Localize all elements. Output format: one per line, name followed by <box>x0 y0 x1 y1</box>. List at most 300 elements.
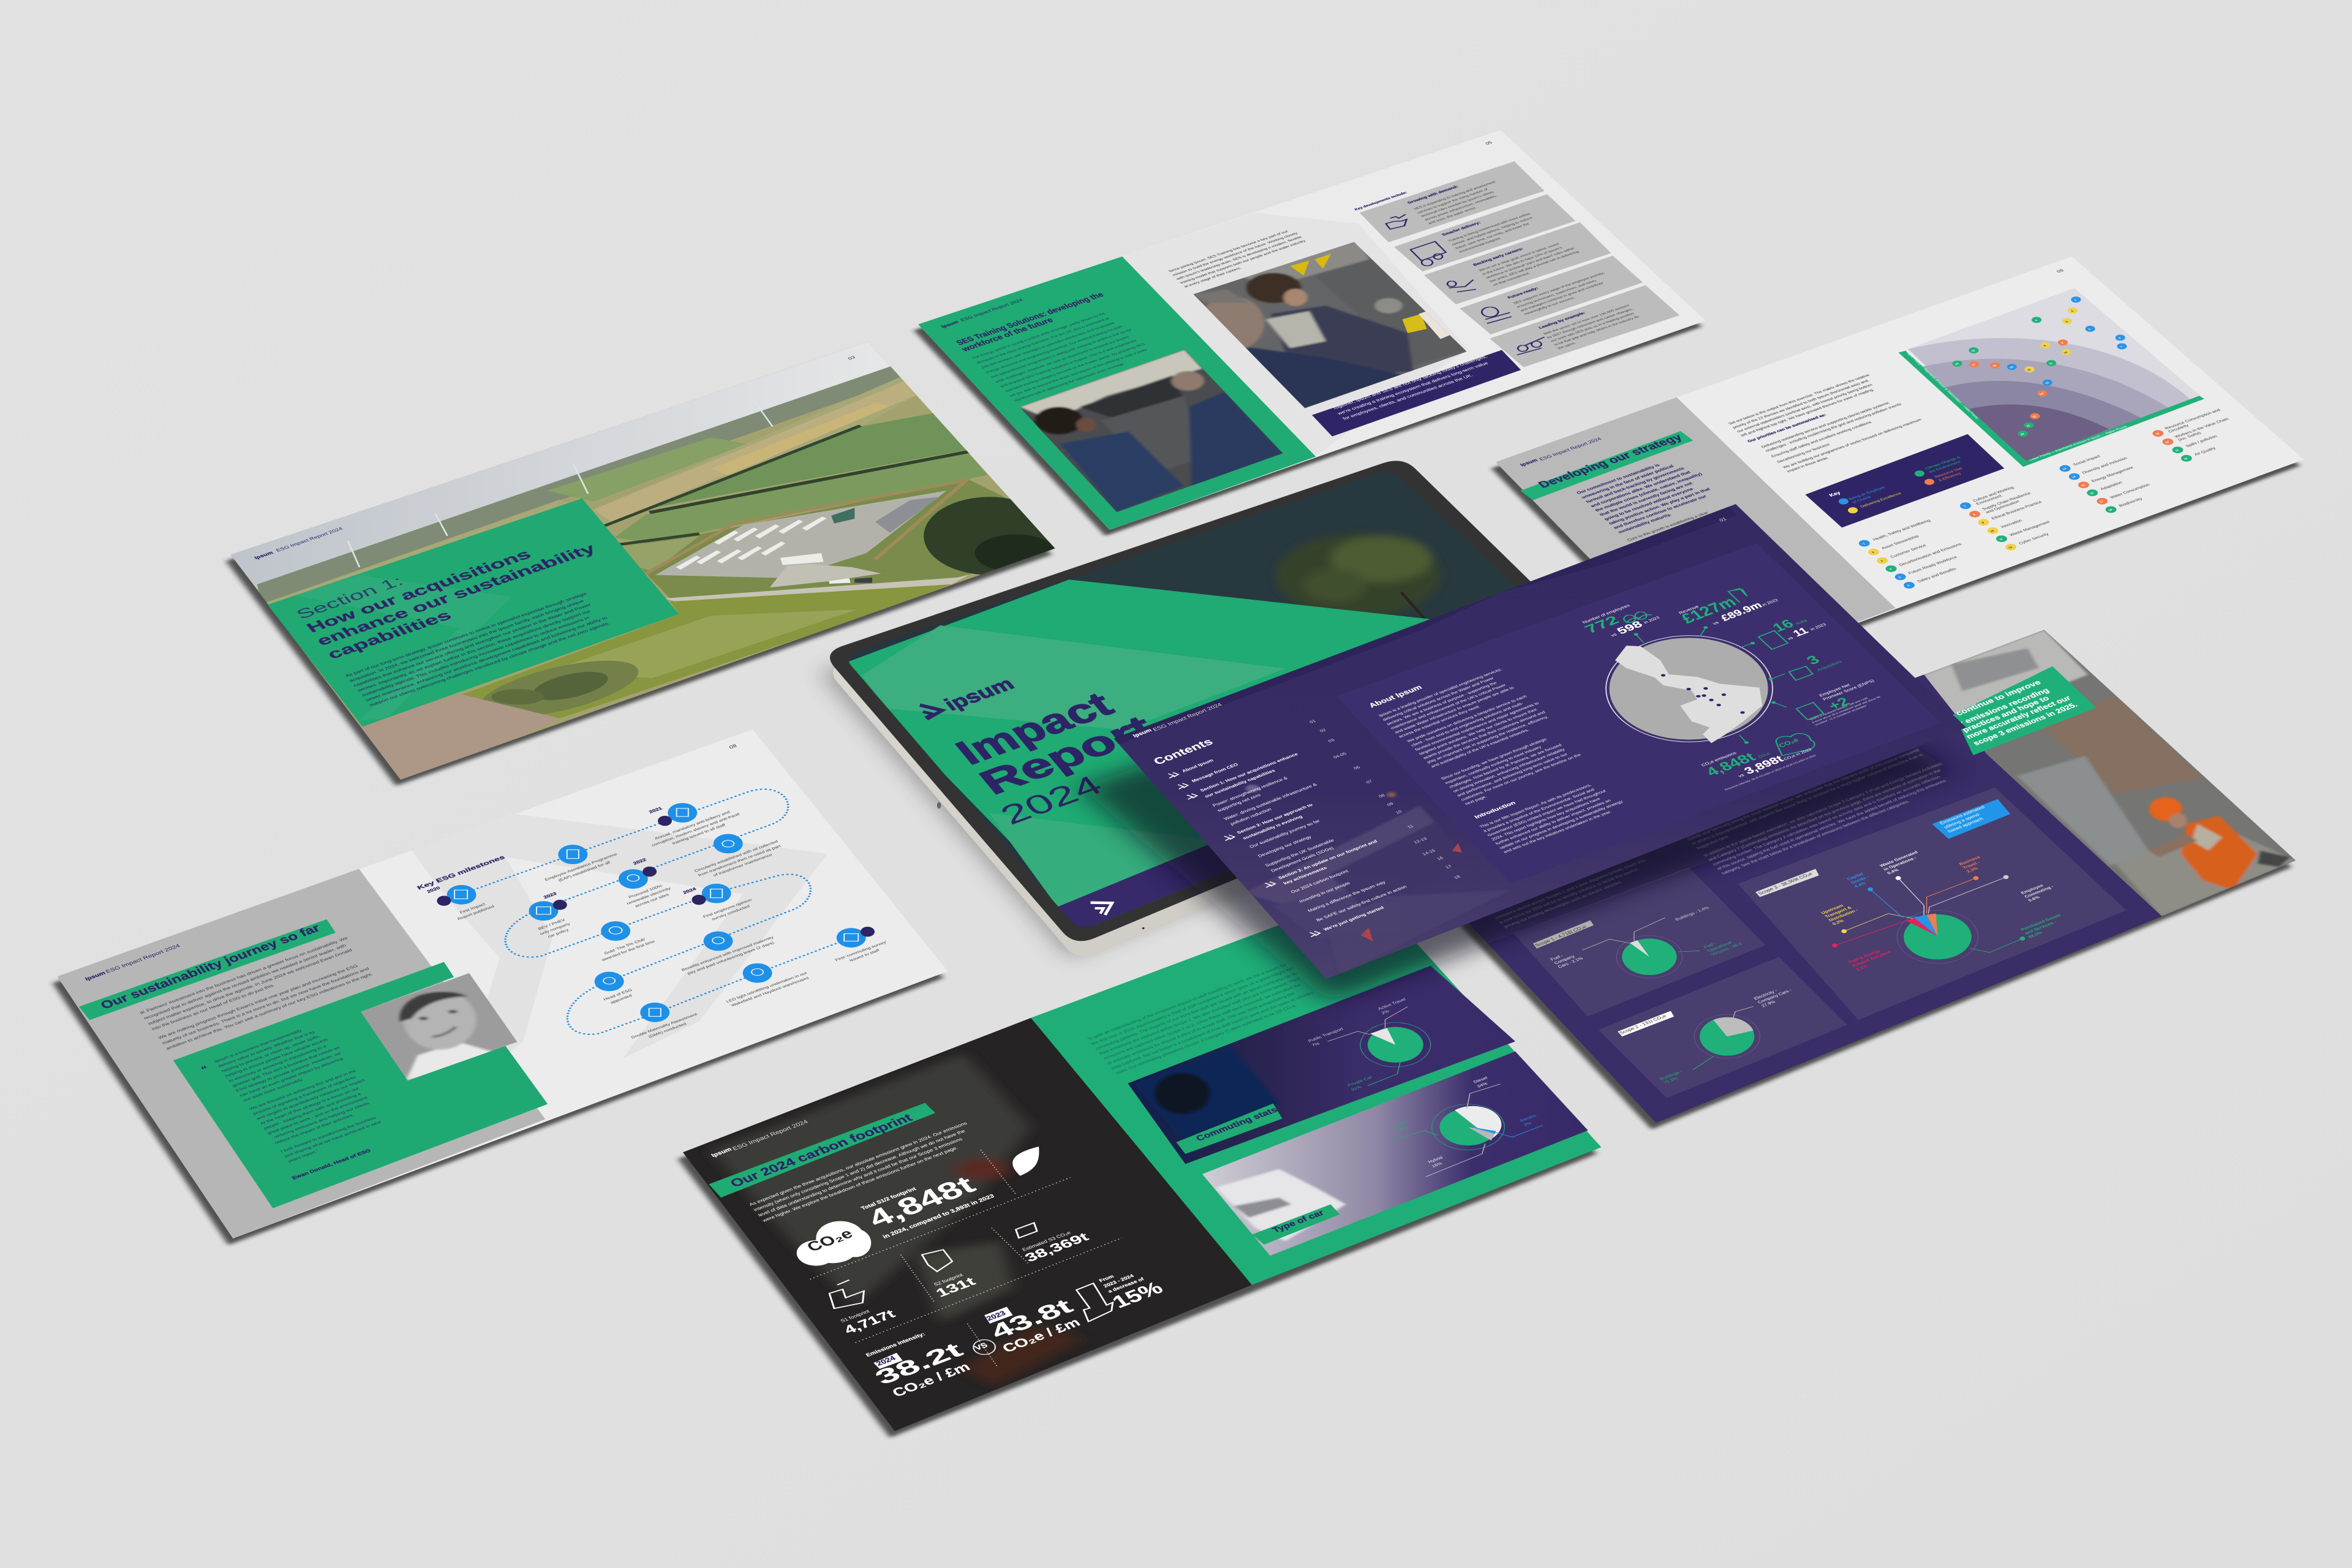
page numbers: 11 <box>1406 824 1415 829</box>
header <box>710 1119 810 1158</box>
legend numbers: 11 <box>1999 538 2004 541</box>
key box: Delivering Excellence <box>1860 492 1902 508</box>
panel: SES training spread <box>914 130 1706 536</box>
section heading: Section 1: <box>293 574 407 622</box>
tablet screen <box>827 459 1686 957</box>
milestone captions: Benefits enhanced with improved maternity <box>680 935 775 972</box>
stat: revenue <box>1678 589 1779 627</box>
legend list: Biodiversity <box>2118 497 2144 508</box>
legend list: and Optimisation <box>1985 500 2021 514</box>
card: leading by example: by 2027 through retirement and career changes, <box>1546 307 1634 339</box>
legend list: Adaptation <box>2099 481 2124 491</box>
commuting text: emissions are captured within Scope 1 or 2. Once these staff were removed, we estimated the <box>1102 982 1302 1061</box>
callout: emissions recording: more accurately reflect our <box>1964 694 2073 740</box>
contents list <box>1151 718 1461 937</box>
map globe <box>1606 627 1787 744</box>
chart: materiality matrix <box>1902 288 2202 464</box>
header: Ipsum <box>1518 458 1539 467</box>
stat: emissions intensity: Emissions intensity: <box>865 1332 927 1358</box>
chart: scope 3 pie: Commuting - <box>2023 884 2055 899</box>
stat: S2 footprint: S2 footprint <box>932 1272 964 1287</box>
stat: employees: Number of employees <box>1581 603 1631 625</box>
legend numbers <box>1862 432 2189 587</box>
contents list: About Ipsum <box>1181 758 1215 774</box>
body: wide challenges. However, we saw an opportunity to expand our impact <box>994 336 1130 384</box>
icon: CO2e cloud <box>797 1221 871 1266</box>
intro text: level of data understanding to determine why and it could be that our Scope 3 emissions <box>756 1136 963 1218</box>
body: and acquired SES Training Solutions in August. This is a well-established <box>1000 339 1138 388</box>
stat: acquisitions <box>1789 653 1844 680</box>
contents list: Be SAFE our safety-first culture in action <box>1315 884 1408 922</box>
stat: CO2e emissions: CO₂e <box>1757 751 1771 759</box>
page numbers: 02 <box>1319 728 1327 733</box>
quote panel: - reducing emissions and helping our clients <box>270 1101 371 1140</box>
about text: and sets out the key initiatives undertaken in the year. <box>1502 809 1613 854</box>
about text: Since our founding, we have grown through strategic <box>1439 737 1548 781</box>
quote panel: ESG strategy to provide purpose. However, we <box>235 1051 342 1093</box>
contents list: Our 2024 carbon footprint <box>1289 869 1350 894</box>
header: Ipsum <box>940 320 960 329</box>
body text right: In addition to the spend-based estimation, we also calculated Scope 3 Category 3 (Fuel and Energy Related Activities) <box>1702 761 1943 858</box>
callout banner: we're creating a training ecosystem that delivers long-term value <box>1336 361 1490 416</box>
legend numbers: 5 <box>1898 576 1902 579</box>
header: ESG Impact Report 2024 <box>1538 436 1603 462</box>
about panel <box>1336 543 1941 884</box>
stat: revenue: vs <box>1711 620 1720 626</box>
chart: scope 3 pie: Waste Generated <box>1879 850 1919 868</box>
intro text: IK Partners' investment into the business has driven a greater focus on sustainability. We <box>139 936 349 1015</box>
stat: 15 percent decrease: a decrease of <box>1107 1276 1145 1294</box>
section heading: How our acquisitions <box>303 547 535 636</box>
contents list: Section 3: An update on our footprint and <box>1277 839 1379 880</box>
body: demands of the clean energy transition. For the UK, this is estimated at <box>976 317 1110 364</box>
legend list: Spills / pollution <box>2185 434 2218 448</box>
strategy text: Ensuring staff safety and excellent working conditions <box>1771 421 1873 458</box>
stat: total footprint: Total S1/2 footprint <box>860 1186 918 1212</box>
legend numbers: 18 <box>2108 508 2114 512</box>
body: energy, technical and engineering expertise. Our existing training for both <box>985 325 1124 374</box>
stat: NPS: Promoter Score (ENPS) <box>1822 679 1875 701</box>
strategy text: left and highest top right. We have grouped themes for ease of reading. <box>1740 388 1875 437</box>
quote panel <box>173 962 548 1208</box>
quote panel: can have an even greater impact by delivering <box>238 1057 344 1098</box>
body: and therefore continue to accelerate our <box>1612 494 1708 530</box>
page numbers: 04-05 <box>1332 752 1348 760</box>
page numbers: 14-15 <box>1421 848 1436 856</box>
body text right: commuting number. The Category 3 calculation was based on activity data and is therefore an accurate reflection <box>1711 774 1942 867</box>
milestone years: 2022 <box>632 857 647 865</box>
milestone captions: Wakefield and Haydock warehouses <box>730 976 810 1008</box>
stat: CO2e emissions <box>1700 733 1817 791</box>
type of car panel: Type of car <box>1270 1208 1326 1235</box>
stat: total footprint: 4,848t <box>862 1172 981 1232</box>
about text: and sustainability of the UK's essential networks. <box>1430 728 1530 769</box>
milestone captions: Procured 100% <box>628 883 663 899</box>
strategy text: Decarbonising our business <box>1776 443 1831 464</box>
panel: contents and about spread <box>1102 504 1966 979</box>
chart dots: 4 <box>2034 319 2038 322</box>
milestone captions: First 'commuting survey' <box>834 940 888 962</box>
about text: assets provide the services that their customers demand and <box>1422 710 1547 760</box>
card: smarter delivery: Smarter delivery: <box>1441 221 1482 236</box>
chart: scope 3 pie: 0.4% <box>1886 867 1900 875</box>
chart: scope 3 pie: Upstream <box>1820 903 1845 915</box>
stat: CO2e emissions: 3,898t <box>1742 753 1787 777</box>
chart: scope 3 pie <box>1820 850 2070 971</box>
chart dots: 22 <box>2019 432 2026 436</box>
header: Ipsum <box>84 970 107 982</box>
section heading: enhance our sustainability <box>314 541 600 649</box>
quote panel: We are focused on achieving this and are in the <box>248 1069 357 1111</box>
intro text: recognised that to deliver against the revised ambition we needed a senior leader, with <box>143 943 347 1020</box>
key box: Being an Employer <box>1848 486 1887 501</box>
body: The Energy sector is facing a critical skills shortage, partly driven by the <box>971 312 1107 360</box>
quote panel: and targets to quantitatively measure our impact. <box>255 1077 367 1121</box>
section heading: capabilities <box>324 608 455 662</box>
legend list: Health, Safety and Wellbeing <box>1872 519 1932 541</box>
milestones timeline: Key ESG milestones <box>416 854 507 891</box>
quote panel: our work more sustainably. <box>242 1077 304 1102</box>
chart dots: 21 <box>2026 424 2032 428</box>
commuting text: the first time in 2024. Approximately a third of staff completed it which gave us a good insight into <box>1090 966 1295 1046</box>
chart: commuting pie: 7% <box>1311 1041 1321 1047</box>
stat: S2 footprint <box>922 1250 979 1300</box>
key box: of Choice <box>1852 496 1872 504</box>
photo: engineer at panel <box>1193 240 1468 408</box>
legend list: Social Impact <box>2072 454 2101 467</box>
contents list: Supporting the UK Sustainable <box>1264 838 1336 868</box>
panel: section 1 aerial photo spread <box>223 342 1055 788</box>
callout: emissions recording <box>1938 666 2096 755</box>
stat: revenue: £127m <box>1678 594 1740 627</box>
stat: employees: 598 <box>1615 619 1645 636</box>
legend numbers: 17 <box>2099 500 2105 503</box>
chart: scope 1 pie: Buildings - 1.4% <box>1674 905 1711 922</box>
body: sustainability maturity. <box>1617 513 1673 534</box>
stat: CO2e emissions: 4,848t <box>1702 750 1759 779</box>
about text: delivering critical solutions across the Water and Power <box>1381 676 1495 722</box>
chart: car type pie: 48% <box>1396 1125 1409 1133</box>
key box <box>1805 434 2004 527</box>
header: ESG Impact Report 2024 <box>105 943 182 974</box>
contents list: Section 2: How our approach to <box>1236 802 1314 835</box>
milestone captions: Gold 'The 5% Club' <box>603 937 647 956</box>
photo: Ewan Donald <box>361 973 517 1080</box>
chart: scope 3 pie: Transport & <box>1823 905 1853 919</box>
chart: scope 3 pie: 3.1% <box>1855 964 1869 971</box>
header: Ipsum <box>710 1147 733 1158</box>
photo: engineer <box>1924 630 2296 916</box>
panel: scope emissions spread <box>1408 630 2296 1129</box>
quote panel: I look forward to transforming the business <box>280 1115 377 1154</box>
list chevrons <box>1168 772 1320 937</box>
card: future ready <box>1460 255 1643 334</box>
stat: acquisitions: 3 <box>1804 653 1823 668</box>
section body text: sectors. Importantly, as we explain further in this section, these acquisitions directly support our <box>356 609 592 693</box>
header: ESG Impact Report 2024 <box>731 1119 810 1152</box>
intro paragraph: mission to build the energy workforce of the future. Working closely <box>1172 232 1299 277</box>
panel: sustainability journey spread <box>53 729 948 1245</box>
chart: commuting pie: 2% <box>1380 1009 1390 1016</box>
quote panel: helping to ensure people have reliable access <box>224 1037 329 1078</box>
commuting text: To gain an understanding of the emissions impact of staff travelling to work, we ran a survey for <box>1086 962 1288 1041</box>
stat: acquisitions: Acquisitions <box>1815 659 1844 672</box>
contents list: key achievements <box>1282 865 1329 886</box>
page number: 09 <box>2056 268 2065 274</box>
callout banner: Together, Ipsum and SES are not only tackling today's challenges, <box>1331 355 1488 410</box>
page numbers: 16 <box>1436 856 1444 861</box>
chart: scope 3 pie: Capital <box>1845 872 1864 881</box>
legend list: Supply Chain Resilience <box>1981 491 2032 511</box>
about text: and waste Water infrastructure to ensure people are able to <box>1393 685 1515 734</box>
card: growing with demand: Growing with demand: <box>1406 185 1459 205</box>
header <box>1131 516 1728 738</box>
chart: commuting pie <box>1307 997 1431 1092</box>
chart: car type pie: 2% <box>1523 1121 1532 1127</box>
contents list: pollution reduction <box>1229 807 1273 826</box>
card: growing with demand: and soon, the water sector. <box>1427 206 1478 225</box>
milestone captions: renewable electricity <box>625 886 672 905</box>
about text: 2024. This report highlights how key acquisitions have <box>1490 796 1601 842</box>
cover logo: ipsum <box>940 674 1019 715</box>
stat: emissions intensity: 38.2t <box>870 1338 968 1389</box>
callout: spend based: Emissions estimated <box>1939 805 1986 826</box>
stat: S3 footprint <box>1016 1223 1092 1265</box>
chart: scope 3 pie: Related Activities <box>1851 949 1892 968</box>
legend list: Workers in the Value Chain <box>2174 417 2230 439</box>
stat: emissions intensity: 2024 <box>875 1355 897 1367</box>
body: specialist training company focused on the Power sector. By acquiring SES <box>1004 342 1147 393</box>
body: Our commitment to sustainability is <box>1575 463 1661 495</box>
legend numbers: 7 <box>1963 505 1967 508</box>
cover title: Impact <box>948 685 1121 772</box>
chart: scope 3 pie: Business <box>1958 855 1981 866</box>
chart: car type pie <box>1392 1076 1542 1177</box>
chart dots: 17 <box>1971 363 1977 367</box>
commuting text: data captured. Set out below is a breakdown of how staff travel to work and the types of vehicles <box>1110 990 1314 1070</box>
cover chevron <box>1091 903 1112 915</box>
about text: access the essential services they need. <box>1397 704 1481 739</box>
quote panel: Ewan Donald, Head of ESG <box>291 1148 372 1180</box>
contents list: We're just getting started <box>1322 905 1385 932</box>
stat: emissions intensity <box>865 1295 1084 1400</box>
legend list: Salary and Benefits <box>1916 567 1958 584</box>
about text: sectors. We are a business of purpose - supporting the <box>1385 680 1498 726</box>
about text: Ipsum is a leading provider of specialist engineering services, <box>1378 667 1503 718</box>
chart: scope 2 pie <box>1659 984 1797 1085</box>
contents list: Investing in our people <box>1298 881 1352 903</box>
chart: car type pie: Hybrid <box>1427 1155 1444 1164</box>
milestone captions: Report published <box>456 904 495 921</box>
strategy text: priority of the 22 themes we identified to both Ipsum (horizontal axis) and <box>1732 379 1869 429</box>
header: 01 <box>1718 516 1728 522</box>
header: Ipsum <box>1131 727 1153 738</box>
milestone years: 2021 <box>648 805 663 814</box>
strategy text: Set out below is the output from this exercise. The matrix shows the relative <box>1728 374 1871 426</box>
body text right: Goods and Services) being the most material source. We anticipate that the relevant scale of this source compared <box>1686 748 1920 842</box>
legend list: Culture and Working <box>1972 486 2015 503</box>
chart dots: 18 <box>1954 363 1960 366</box>
commuting text: their emissions are captured within Scope 1. We also excluded staff who are home based. Their <box>1098 976 1302 1056</box>
legend numbers: 13 <box>2062 467 2068 471</box>
card: leading by example <box>1490 285 1679 368</box>
about text: Introduction <box>1473 800 1517 820</box>
body: turmoil and back-tracking by governments <box>1585 466 1686 503</box>
stat: NPS <box>1796 674 1883 726</box>
card: growing with demand: SES is expanding its training and assessment <box>1413 181 1496 211</box>
stat: NPS: *ENPS is measured between -100 and +100. <box>1809 696 1869 721</box>
stat: CO2e emissions: CO₂e emissions <box>1700 751 1738 767</box>
stat: emissions intensity: VS <box>973 1341 989 1352</box>
legend list: Resource Consumption and <box>2164 408 2222 431</box>
milestone years: 2020 <box>426 885 441 894</box>
milestone captions: pay and paid volunteering leave (2 days) <box>686 940 775 976</box>
chart: scope 3 pie: Purchased Goods <box>2019 913 2062 932</box>
chart: scope 1 pie: Cars - 2.1% <box>1556 956 1585 969</box>
stat: revenue: in 2023 <box>1761 598 1779 607</box>
chart dots: 9 <box>2043 344 2047 347</box>
contents list: Contents <box>1151 736 1216 767</box>
chart: car type pie: 16% <box>1431 1161 1443 1169</box>
stat: total footprint <box>860 1172 996 1240</box>
chart: scope 1 pie: Operational <box>1706 940 1733 953</box>
commuting text: commuting patterns. The majority of our front-line staff are issued with an Ipsum company car so <box>1094 971 1298 1051</box>
heading <box>954 291 1106 353</box>
legend numbers: 12 <box>2008 546 2013 549</box>
chart: scope 2 pie: 72.1% <box>1662 1076 1679 1085</box>
about text: maintenance and enhancement of the UK's critical Power <box>1389 682 1507 730</box>
milestone years: 2023 <box>542 891 558 900</box>
milestone captions: (DMA) conducted <box>647 1022 687 1039</box>
key box: Key <box>1828 490 1842 497</box>
grey column <box>1496 398 1896 678</box>
chart: scope 3 pie: 0.2% <box>1831 918 1845 926</box>
milestone years: 2024 <box>682 886 697 895</box>
stat: employees: vs <box>1610 632 1618 638</box>
stat: hubs: in 2023 <box>1809 622 1827 631</box>
stat: 15 percent decrease: 2023 - 2024 <box>1102 1273 1135 1289</box>
intro paragraph: training model that supports both our people and the water industry <box>1180 239 1307 285</box>
stat: employees <box>1581 603 1660 638</box>
section body text: support our clients overcoming challenges introduced by climate change and the net zero agenda. <box>368 620 611 707</box>
about text: targeted point solutions. We help our clients to ensure their <box>1418 707 1539 756</box>
card: smarter delivery <box>1394 194 1575 271</box>
header: ESG Impact Report 2024 <box>1151 702 1223 732</box>
contents list: Water: driving sustainable infrastructure & <box>1223 782 1319 821</box>
chart: scope 3 pie: in Operations - <box>1882 856 1918 872</box>
legend numbers: 6 <box>1907 584 1911 587</box>
about text: customers. For more on our journey, see the timeline on the <box>1460 752 1582 802</box>
card: leading by example: our work with SES puts us in a leading position <box>1550 312 1635 343</box>
stat: emissions intensity: CO₂e / £m <box>1000 1316 1084 1355</box>
stat: CO2e emissions: vs <box>1737 773 1746 778</box>
heading: workforce of the future <box>959 316 1055 353</box>
scope 3 panel: Scope 3 - 38,369t CO₂e <box>1757 871 1814 896</box>
card: backing early careers <box>1424 222 1611 304</box>
milestone captions: appointed <box>609 993 633 1005</box>
panel: developing our strategy spread <box>1491 257 2304 684</box>
body: and apprenticeship programmes is doing well, helping to address the sector <box>990 328 1133 379</box>
legend list <box>1859 408 2233 589</box>
card: future ready: Future-ready: <box>1507 287 1539 300</box>
legend numbers: 20 <box>2165 440 2171 444</box>
header: ESG Impact Report 2024 <box>959 298 1024 322</box>
stat: NPS: 'excellent', +2 is considered 'acceptable' <box>1814 704 1868 726</box>
green page <box>1031 891 1601 1285</box>
stat: hubs: vs <box>1786 635 1795 641</box>
strategy text <box>1728 373 1928 473</box>
stat: S2 footprint: 131t <box>933 1275 979 1300</box>
chart: car type pie: Diesel <box>1472 1076 1489 1084</box>
chart: scope 3 pie: Goods - <box>1849 875 1871 885</box>
chart dots: 10 <box>2063 351 2069 355</box>
stat: S3 footprint: Estimated S3 CO₂e <box>1021 1230 1072 1252</box>
about text: further enhanced our ability to deliver impact, provides an <box>1494 798 1612 846</box>
legend list: Environment <box>1975 494 2003 506</box>
title bar <box>709 1103 935 1197</box>
callout banner <box>1312 350 1521 436</box>
about text: next page. <box>1464 794 1488 806</box>
contents list: Power: strengthening resilience & <box>1212 775 1289 808</box>
key box: & Efficiency <box>1937 472 1962 482</box>
stat: CO2e emissions: CO₂e <box>1777 737 1801 749</box>
milestone captions: issued to staff <box>848 948 881 962</box>
chart dots: 12 <box>2026 368 2032 372</box>
chart dots: 2 <box>2070 309 2075 312</box>
milestone captions: Head of ESG <box>602 987 633 1001</box>
grey column: Core to this growth is establishing a clear <box>1626 511 1710 542</box>
commuting stats panel: Commuting stats <box>1194 1106 1280 1143</box>
contents list: Making a difference the Ipsum way <box>1306 880 1387 913</box>
title bar: Developing our strategy <box>1536 432 1686 490</box>
body text right: and Category 7 (Commuting) emissions. As described on the previous page, there are elements of estimation in the <box>1707 768 1942 862</box>
quote panel: delivers value to society. Whether that is by <box>217 1030 316 1068</box>
body: we are able to expand the reach and impact of this offering to play a more <box>1008 348 1148 398</box>
page numbers: 18 <box>1453 874 1461 880</box>
quote panel: people - keeping them safe and providing a <box>263 1091 362 1131</box>
legend list: Circularity <box>2167 423 2190 434</box>
about text: and performance, and delivering long-term value to our <box>1455 752 1569 797</box>
section heading <box>293 541 600 662</box>
legend numbers: 15 <box>2080 484 2086 488</box>
stat: emissions intensity: CO₂e / £m <box>889 1360 973 1400</box>
page numbers: 07 <box>1365 779 1374 785</box>
body text left: proving out existing technologies such as electric vehicles. <box>1502 880 1623 929</box>
stat: S1 footprint <box>829 1280 899 1337</box>
body: the multiple crises (climate, nature, inequality) <box>1594 472 1703 513</box>
section body text: acquisition. In 2024, we welcomed three businesses into the Ipsum family, each bringing unique <box>348 598 585 683</box>
quote panel: process of agreeing a framework of objectives <box>252 1075 357 1116</box>
stat: S1 footprint: S1 footprint <box>839 1308 871 1324</box>
icon: leaf <box>1012 1147 1039 1176</box>
card: growing with demand <box>1360 161 1544 243</box>
milestone captions: corruption, modern slavery and anti-fraud <box>650 812 741 848</box>
cover band <box>1057 831 1335 938</box>
scope 3 panel <box>1738 788 2126 1020</box>
milestone captions <box>453 807 892 1044</box>
section body text: sewer maintenance, enhancing our workforce development capabilities and bolstering our ability to <box>364 616 609 703</box>
legend list: Energy Management <box>2090 466 2135 483</box>
grey column <box>57 869 545 1238</box>
body text left: emissions source across Scopes 1 and 2 (see diagrams below). Given this, <box>1493 858 1648 920</box>
chart: materiality matrix: Lower Priority — Importance of Issues to Ipsum — Higher Priority <box>2029 425 2128 462</box>
card: future ready: meaningfully to our success. <box>1523 296 1577 316</box>
chart dots: 8 <box>2060 342 2065 345</box>
quote panel: Ipsum is a business that fundamentally <box>213 1028 303 1063</box>
chart: scope 3 pie: Distribution - <box>1827 908 1860 922</box>
quote panel: helping to prevent, or clean up, sewer spills, <box>221 1034 321 1073</box>
callout: emissions recording: practices and hope to <box>1960 695 2051 734</box>
